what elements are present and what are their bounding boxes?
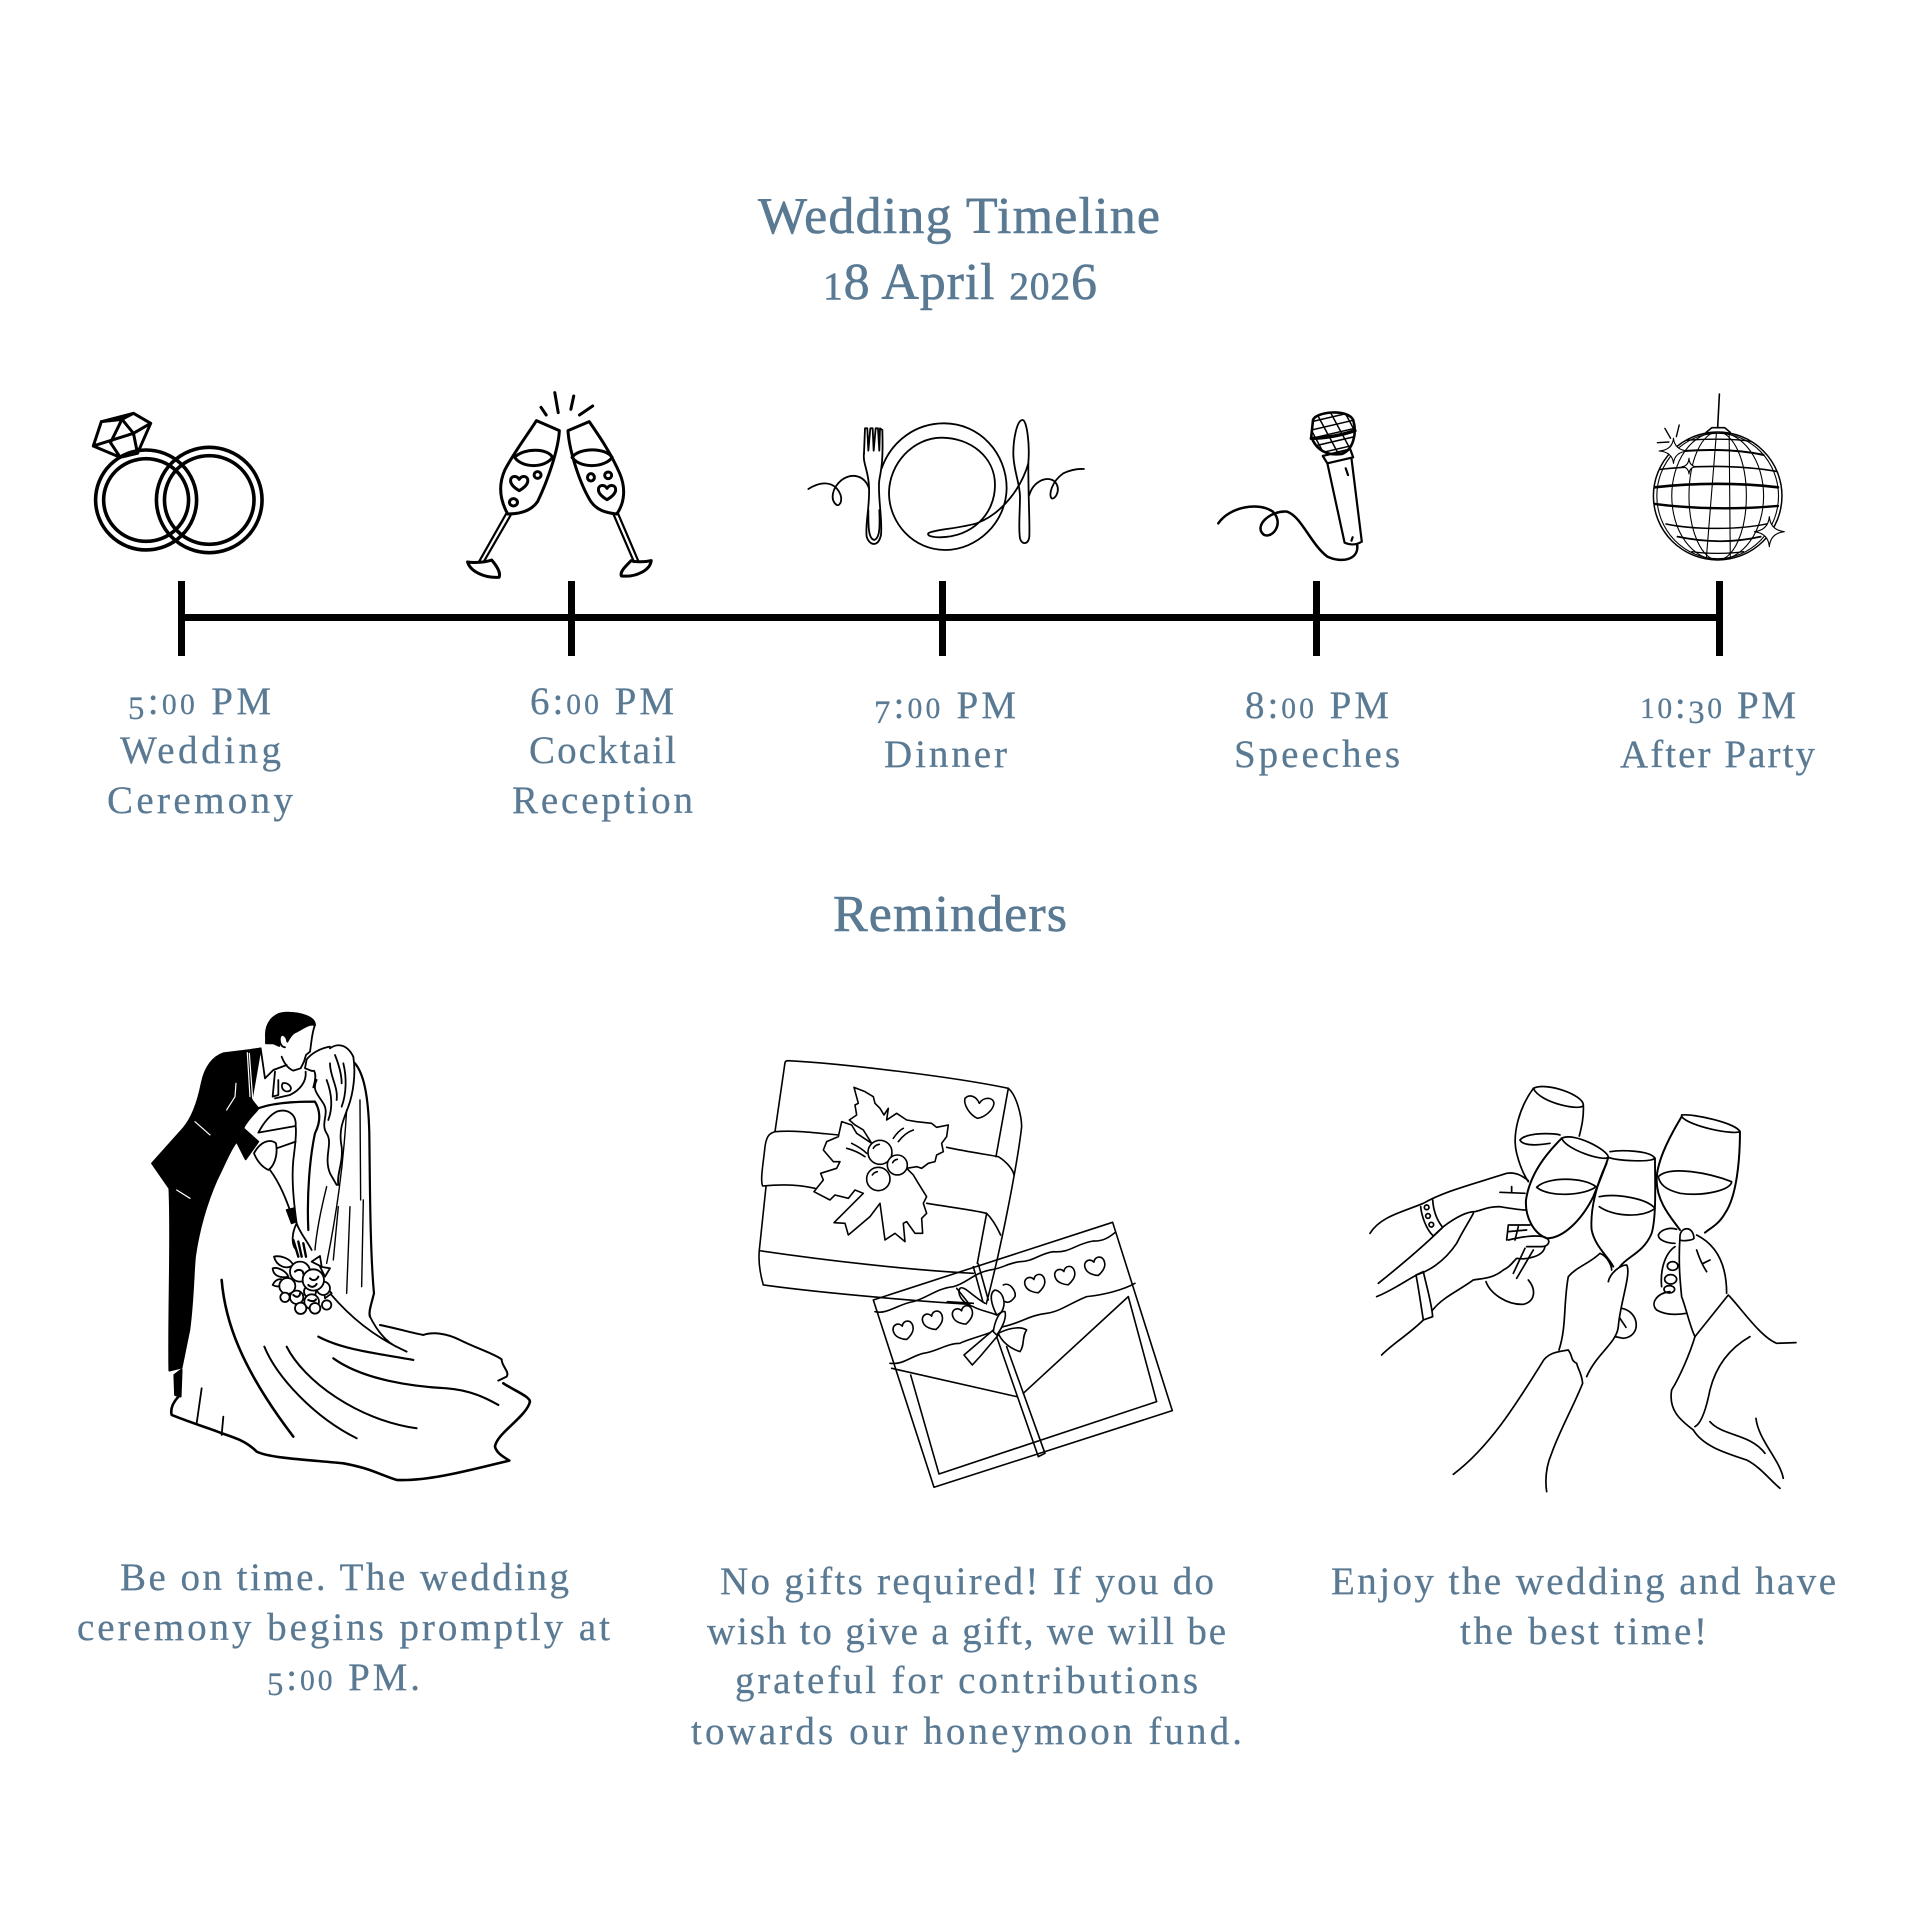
label: 5:00 PM wedding ceremony: Ceremony xyxy=(107,779,294,822)
label: 10:30 PM after party: 3 xyxy=(1688,695,1705,731)
label: 6:00 PM cocktail reception: Cocktail xyxy=(529,729,676,772)
label: 10:30 PM after party: 0 xyxy=(1707,693,1722,725)
label: 5:00 PM wedding ceremony: 00 PM xyxy=(162,680,271,723)
label: 6:00 PM cocktail reception: 6:00 PM xyxy=(530,680,674,723)
icon: disco ball xyxy=(1653,394,1784,560)
text: be on time: 00 PM. xyxy=(300,1656,420,1699)
text: no gifts required: towards our honeymoon fund. xyxy=(691,1710,1242,1753)
arms and hands xyxy=(1370,1173,1528,1233)
timeline xyxy=(178,581,1723,656)
text: enjoy the wedding: the best time! xyxy=(1460,1610,1707,1653)
label: 5:00 PM wedding ceremony: Wedding xyxy=(120,729,281,772)
label: 5:00 PM wedding ceremony: : xyxy=(148,680,159,723)
label: 6:00 PM cocktail reception xyxy=(512,680,693,822)
heart row xyxy=(892,1320,916,1343)
illustration: bride and groom xyxy=(152,1013,530,1480)
title: Wedding Timeline xyxy=(758,188,1160,245)
title xyxy=(758,188,1160,311)
label: 7:00 PM dinner: Dinner xyxy=(884,733,1007,776)
title: 18 April 2026 xyxy=(823,254,1097,311)
heading: reminders: Reminders xyxy=(833,886,1067,943)
label: 7:00 PM dinner: 00 PM xyxy=(908,684,1016,727)
groom silhouette xyxy=(152,1048,261,1371)
glass: centre right xyxy=(1608,1151,1655,1161)
text: enjoy the wedding xyxy=(1331,1560,1836,1653)
label: 10:30 PM after party: After Party xyxy=(1620,733,1816,776)
text: no gifts required: No gifts required! If you do xyxy=(720,1560,1214,1603)
label: 5:00 PM wedding ceremony: 5 xyxy=(128,691,144,727)
illustration: wrapped gifts xyxy=(759,1061,1172,1487)
label: 8:00 PM speeches: 8:00 PM xyxy=(1245,684,1389,727)
glass: right xyxy=(1682,1115,1740,1132)
text: be on time: Be on time. The wedding xyxy=(120,1556,569,1599)
text: be on time: : xyxy=(286,1656,297,1699)
glass: centre left xyxy=(1562,1137,1608,1158)
label: 8:00 PM speeches xyxy=(1234,684,1400,776)
icon: plate with fork and knife xyxy=(808,420,1084,550)
label: 5:00 PM wedding ceremony xyxy=(107,680,294,822)
text: no gifts required: grateful for contributions xyxy=(735,1659,1198,1702)
glass: back left xyxy=(1533,1087,1583,1107)
text: be on time: ceremony begins promptly at xyxy=(77,1606,610,1649)
top gift box xyxy=(759,1061,1022,1305)
bride xyxy=(305,1047,330,1087)
text: be on time: 5 xyxy=(267,1667,283,1703)
lower gift xyxy=(873,1222,1172,1487)
label: 6:00 PM cocktail reception: Reception xyxy=(512,779,693,822)
bow xyxy=(959,1288,997,1315)
bouquet xyxy=(273,1256,332,1314)
label: 8:00 PM speeches: Speeches xyxy=(1234,733,1400,776)
text: enjoy the wedding: Enjoy the wedding and have xyxy=(1331,1560,1836,1603)
text: no gifts required: wish to give a gift, we will be xyxy=(707,1610,1226,1653)
label: 7:00 PM dinner xyxy=(874,684,1016,776)
label: 7:00 PM dinner: : xyxy=(894,684,904,727)
icon: champagne glasses xyxy=(468,393,651,577)
text: be on time xyxy=(77,1556,610,1703)
label: 7:00 PM dinner: 7 xyxy=(874,695,890,731)
label: 10:30 PM after party: PM xyxy=(1737,684,1796,727)
icon: microphone xyxy=(1218,407,1370,560)
text: no gifts required xyxy=(691,1560,1242,1753)
icon: wedding rings xyxy=(93,413,262,553)
label: 10:30 PM after party: 10: xyxy=(1640,684,1686,727)
illustration: hands toasting wine glasses xyxy=(1370,1087,1796,1492)
label: 10:30 PM after party xyxy=(1620,684,1816,776)
